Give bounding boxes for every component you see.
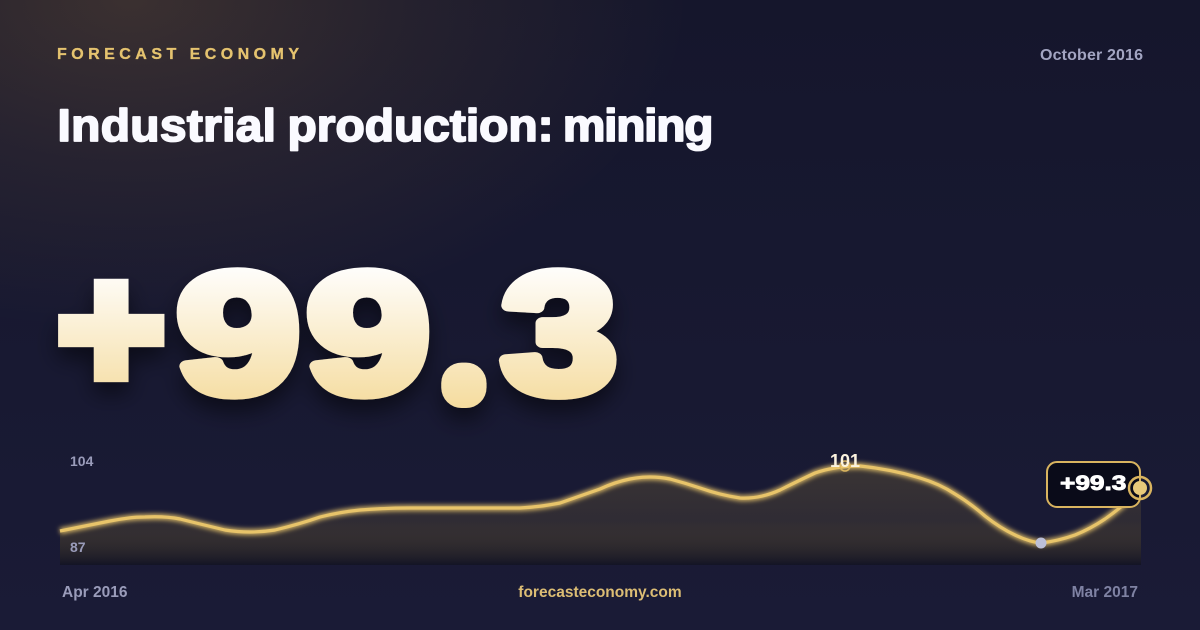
minimum marker [1036,538,1046,548]
site url: forecasteconomy.com [518,584,682,601]
end date label: Mar 2017 [1072,584,1138,601]
start date label: Apr 2016 [62,584,128,601]
title: mining [563,100,712,151]
callout: latest value: +99.3 [1060,471,1126,495]
big value: 99 [177,239,430,428]
line glow [60,466,1141,543]
big value [58,230,617,429]
title: Industrial [58,100,276,151]
latest value marker [1129,477,1151,499]
big value: + [58,230,165,427]
callout: latest value [1047,462,1140,507]
date: October 2016 [1040,47,1143,64]
big value: 3 [501,239,617,429]
title: production: [288,100,554,151]
axis max label: 104 [70,453,94,469]
data line [60,466,1141,543]
area fill [60,466,1141,565]
sparkline chart [60,451,1151,565]
peak marker: 101 [830,451,860,471]
axis min label: 87 [70,539,86,555]
big value: . [460,362,468,395]
brand label: FORECAST ECONOMY [57,46,299,63]
